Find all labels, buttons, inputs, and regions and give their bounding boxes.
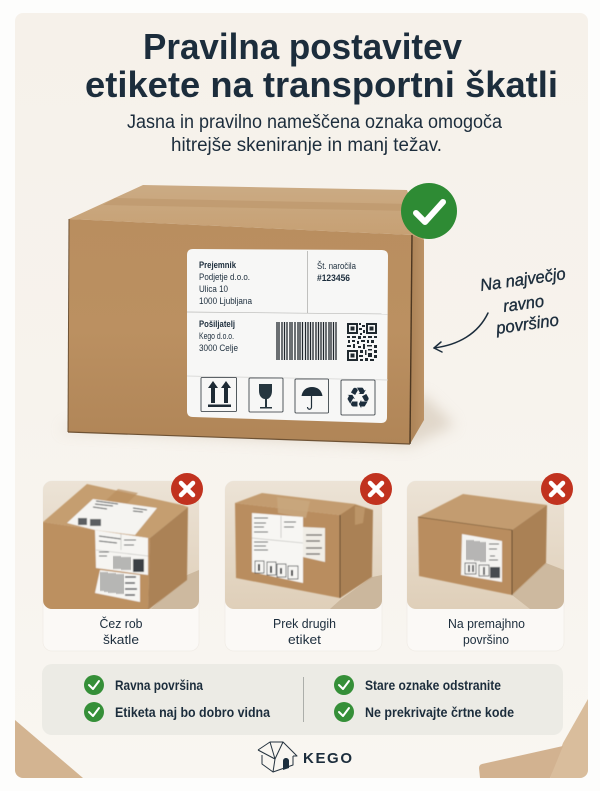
sender address: 3000 Celje (199, 343, 238, 353)
box right face (410, 235, 424, 444)
box top face (69, 185, 424, 240)
recipient address: Ulica 10 (199, 284, 228, 294)
item: do not cover barcodes (334, 702, 514, 722)
sender address: Kego d.o.o. (199, 331, 234, 341)
item: remove old labels: Stare oznake odstranite (365, 677, 501, 693)
item: flat surface: Ravna površina (115, 677, 203, 693)
title (85, 26, 558, 105)
handwritten note: Na največjo (479, 264, 567, 295)
caption: Prek drugih (273, 616, 336, 631)
item: remove old labels (334, 675, 501, 695)
subtitle (127, 112, 502, 156)
handwritten note (479, 264, 567, 338)
shipping label (187, 249, 388, 423)
caption (273, 616, 336, 647)
title: Pravilna postavitev (143, 26, 462, 67)
panel: insufficient surface (407, 481, 564, 651)
sender address (199, 319, 238, 353)
subtitle: hitrejše skeniranje in manj težav. (171, 135, 442, 156)
QR code (347, 323, 377, 361)
item: flat surface (84, 675, 203, 695)
panel: over other labels (225, 481, 382, 651)
handwritten note: ravno (502, 291, 545, 316)
photo: label over box edge (43, 481, 199, 612)
icon: red cross badge 1 (171, 473, 203, 505)
order number (317, 261, 356, 283)
arrow to the box (434, 313, 488, 352)
handwritten note: površino (494, 310, 560, 338)
order number: #123456 (317, 273, 350, 283)
box floor shadow (60, 395, 455, 446)
caption: Na premajhno (448, 616, 525, 631)
item: do not cover barcodes: Ne prekrivajte črtne kode (365, 704, 514, 720)
icon: green check badge (401, 183, 457, 239)
item: well visible: Etiketa naj bo dobro vidna (115, 704, 270, 720)
logo: KEGO: KEGO (303, 750, 352, 767)
icon: recycling: ♻ (345, 381, 371, 415)
caption: etiket (288, 632, 321, 647)
icon: fragile glass (249, 378, 283, 412)
sender address: Pošiljatelj (199, 319, 235, 329)
caption (448, 616, 525, 647)
barcode (277, 322, 336, 360)
logo: KEGO (258, 742, 352, 772)
icon: box house (258, 742, 297, 772)
panel: checklist (42, 664, 563, 735)
caption: površino (463, 632, 509, 647)
caption: Čez rob (100, 616, 142, 631)
icon: red cross badge 3 (541, 473, 573, 505)
title: etikete na transportni škatli (85, 64, 558, 105)
panel: across the edge (43, 481, 199, 651)
icon: keep dry umbrella (295, 379, 328, 413)
recipient address: 1000 Ljubljana (199, 296, 252, 306)
decorative cardboard corners (15, 699, 588, 778)
icon: this way up (201, 378, 236, 412)
subtitle: Jasna in pravilno nameščena oznaka omogoča (127, 112, 502, 133)
main cardboard box (60, 185, 455, 446)
icon: red cross badge 2 (360, 473, 392, 505)
item: well visible (84, 702, 270, 722)
caption: škatle (103, 632, 139, 647)
recipient address: Podjetje d.o.o. (199, 272, 250, 282)
order number: Št. naročila (317, 261, 356, 271)
caption (100, 616, 142, 647)
photo: label on a small surface (407, 481, 564, 609)
box front face (68, 219, 412, 444)
recipient address: Prejemnik (199, 260, 237, 270)
recipient address (199, 260, 252, 306)
photo: label over other labels (225, 481, 382, 609)
